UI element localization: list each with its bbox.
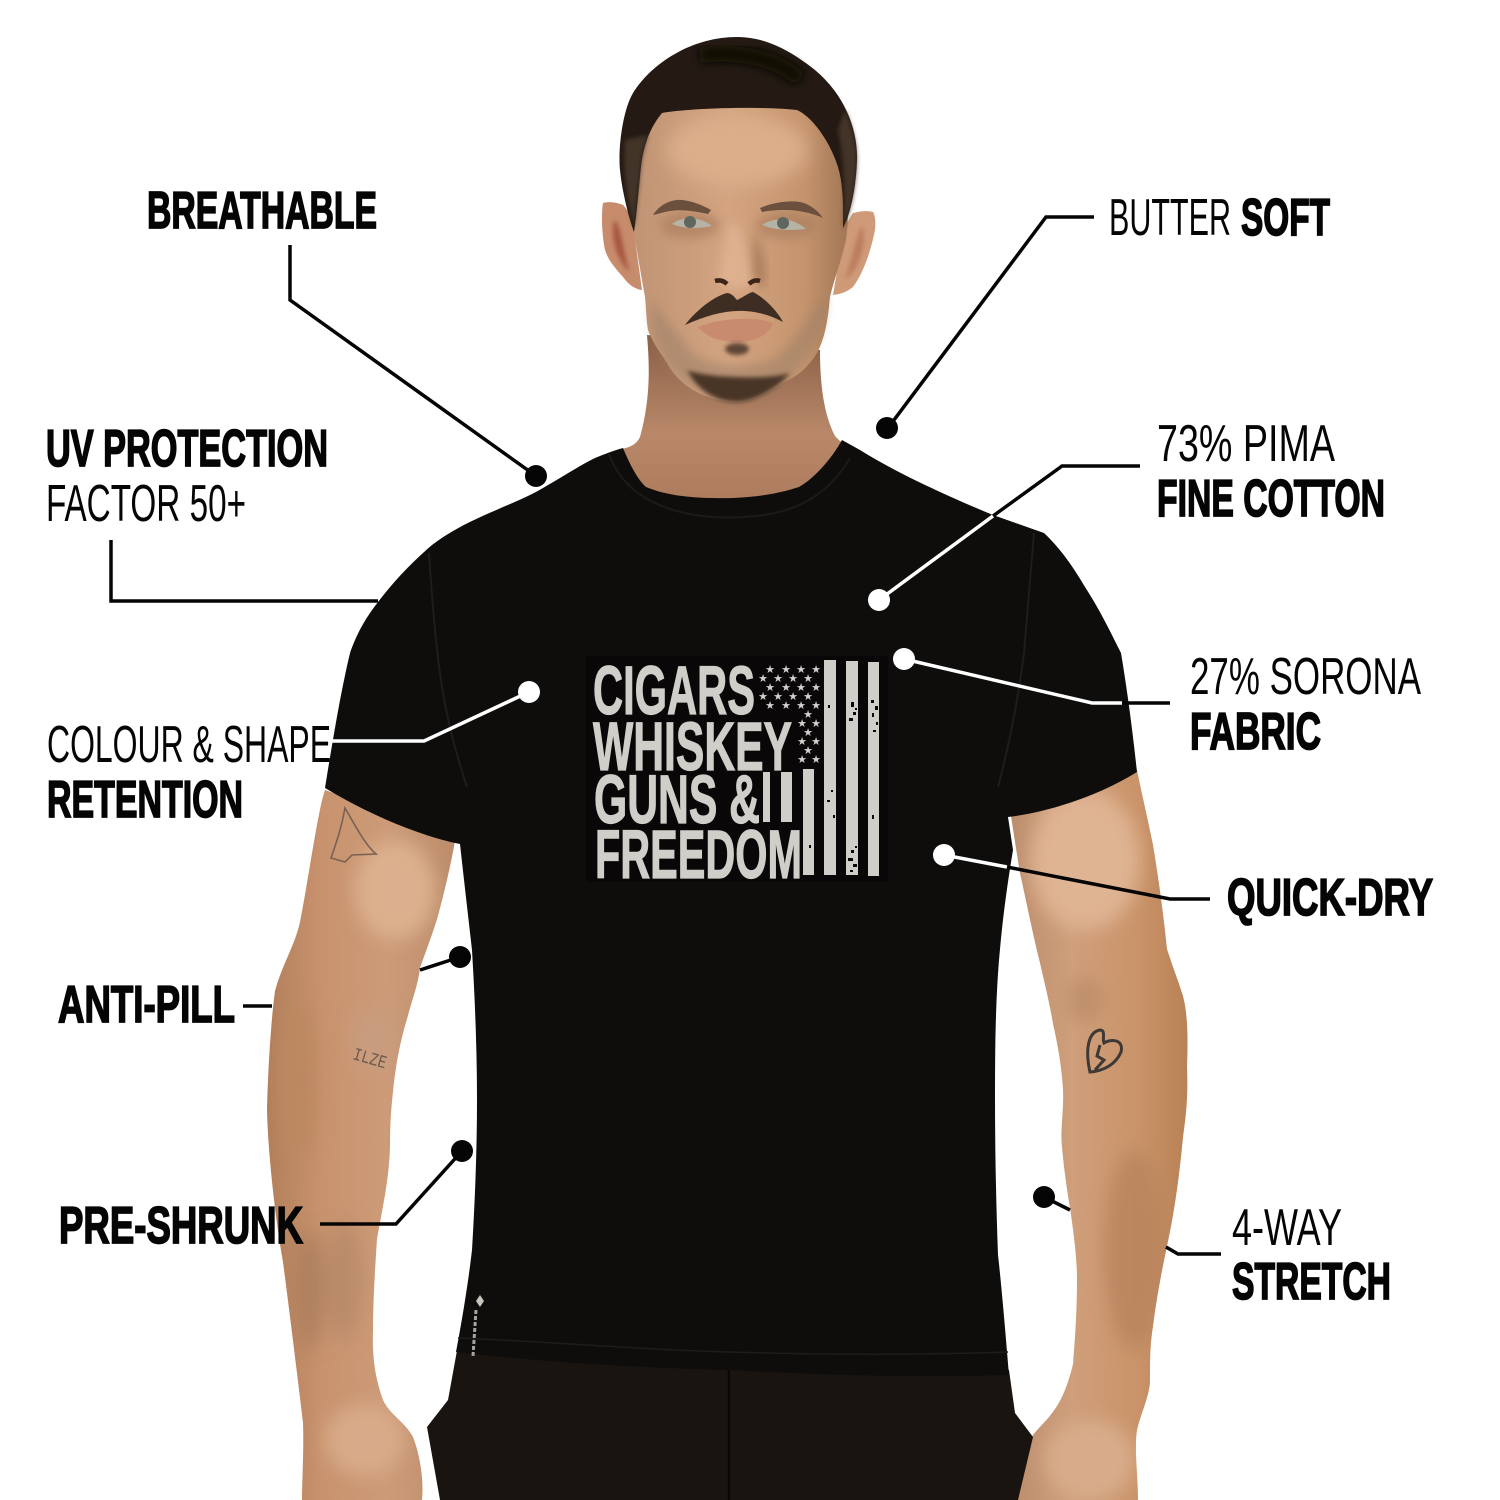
hair bbox=[620, 37, 857, 232]
callout: uv protection: FACTOR 50+ bbox=[46, 475, 246, 533]
hem stitch bbox=[458, 1338, 1008, 1354]
right arm bbox=[1005, 765, 1195, 1500]
callout: pre-shrunk: PRE-SHRUNK bbox=[59, 1197, 303, 1255]
sleeve seams bbox=[429, 533, 1034, 787]
flag stars: ★★ bbox=[797, 735, 821, 748]
tattoo: hand bbox=[331, 808, 376, 862]
flag stars: ★★ bbox=[797, 717, 821, 730]
flag stars: ★★★★ bbox=[765, 663, 821, 676]
slogan: GUNS & bbox=[594, 761, 760, 838]
callout: anti-pill bbox=[58, 946, 471, 1034]
callout: uv protection: UV PROTECTION bbox=[46, 420, 328, 478]
right arm light and hair patches bbox=[1030, 790, 1165, 1500]
moustache bbox=[685, 292, 783, 325]
flag stripes bbox=[763, 660, 879, 876]
callout: pima cotton: FINE COTTON bbox=[1157, 470, 1385, 528]
callout: uv protection bbox=[46, 420, 378, 601]
callout: pima cotton: 73% PIMA bbox=[1157, 415, 1335, 473]
callout: breathable: BREATHABLE bbox=[147, 182, 377, 240]
trouser fly bbox=[728, 1370, 730, 1500]
callout: pima cotton bbox=[868, 415, 1385, 611]
slogan: WHISKEY bbox=[593, 708, 792, 785]
callout: colour and shape retention bbox=[47, 681, 540, 829]
print backing bbox=[586, 656, 888, 882]
callout: anti-pill: ANTI-PILL bbox=[58, 976, 235, 1034]
flag stars: ★★★★ bbox=[758, 690, 813, 703]
stripe distress bbox=[809, 700, 878, 872]
slogan: CIGARS bbox=[593, 652, 755, 729]
callout: sorona fabric bbox=[893, 648, 1421, 761]
lips bbox=[698, 319, 773, 342]
flag stars: ★ bbox=[803, 708, 813, 721]
face bbox=[632, 95, 848, 402]
callout: colour and shape retention: COLOUR & SHAPE bbox=[47, 716, 331, 774]
callout: pre-shrunk bbox=[59, 1140, 473, 1255]
ears bbox=[602, 202, 642, 290]
callout: colour and shape retention: RETENTION bbox=[47, 771, 243, 829]
flag stars: ★★★★ bbox=[765, 681, 821, 694]
flag stars: ★★★★ bbox=[758, 672, 813, 685]
left arm bbox=[267, 790, 455, 1500]
callout: butter soft: SOFT bbox=[1241, 189, 1330, 247]
flag stars: ★ bbox=[803, 726, 813, 739]
callout: 4-way stretch: 4-WAY bbox=[1232, 1199, 1342, 1257]
callout: butter soft bbox=[876, 189, 1330, 439]
callout: breathable bbox=[147, 182, 547, 487]
goatee bbox=[687, 370, 790, 402]
callout: butter soft: BUTTER bbox=[1109, 189, 1231, 247]
flag stars: ★ bbox=[803, 744, 813, 757]
nostrils bbox=[715, 280, 760, 284]
trousers bbox=[427, 1345, 1033, 1500]
tattoo: name: ILZE bbox=[350, 1044, 389, 1074]
slogan bbox=[593, 652, 802, 893]
soul patch bbox=[725, 343, 749, 355]
flag stars: ★★★★ bbox=[765, 699, 821, 712]
collar bbox=[609, 454, 850, 517]
flag stars: ★★ bbox=[797, 753, 821, 766]
man wearing t-shirt bbox=[260, 37, 1195, 1500]
eyes bbox=[672, 218, 806, 230]
callout: 4-way stretch: STRETCH bbox=[1232, 1253, 1391, 1311]
flag stars bbox=[758, 663, 821, 766]
shirt print: cigars whiskey guns and freedom flag bbox=[586, 652, 888, 893]
callout: quick-dry bbox=[933, 844, 1433, 927]
t-shirt bbox=[325, 440, 1137, 1376]
face shading bbox=[652, 114, 826, 402]
eyebrows bbox=[653, 200, 823, 218]
slogan: FREEDOM bbox=[595, 816, 802, 893]
callout: sorona fabric: FABRIC bbox=[1190, 703, 1321, 761]
tattoo: broken heart bbox=[1088, 1030, 1121, 1072]
hem tag bbox=[473, 1295, 484, 1356]
callout: 4-way stretch bbox=[1033, 1186, 1391, 1311]
neck bbox=[622, 335, 852, 500]
left arm light and hair patches bbox=[282, 840, 435, 1476]
